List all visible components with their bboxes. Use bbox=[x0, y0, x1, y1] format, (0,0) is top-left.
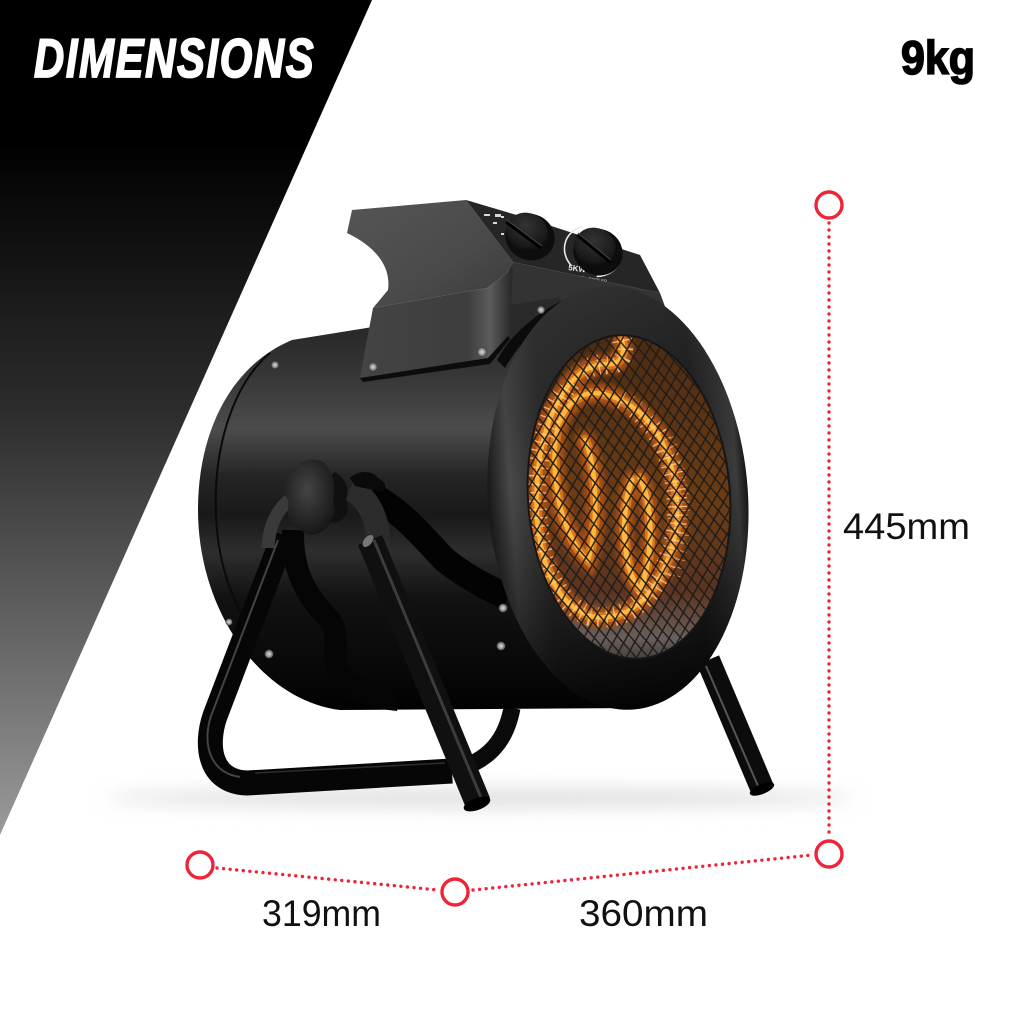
front stand leg bbox=[350, 488, 492, 814]
power label: 5KW bbox=[568, 263, 587, 275]
width label: 360mm bbox=[579, 893, 708, 934]
front plate of handle bbox=[360, 262, 513, 382]
S-shaped mounting bracket bbox=[293, 530, 398, 700]
glowing coils bbox=[537, 340, 679, 617]
rear rim line bbox=[216, 353, 270, 632]
weight label: 9kg bbox=[901, 31, 975, 84]
control panel bbox=[466, 200, 660, 293]
rear U-frame tube bbox=[462, 708, 512, 768]
coil glow bbox=[537, 340, 677, 617]
right front leg bbox=[706, 660, 776, 799]
ground shadow bbox=[105, 788, 855, 808]
side housing below panel bbox=[507, 262, 667, 337]
panel: black gradient diagonal banner bbox=[0, 0, 372, 835]
height dimension line bbox=[816, 192, 842, 867]
knob scale ring bbox=[557, 218, 629, 284]
height label: 445mm bbox=[843, 506, 970, 547]
outer coil bbox=[537, 340, 677, 617]
width dimension line bbox=[442, 855, 812, 905]
inner coil bbox=[624, 478, 650, 590]
grille background bbox=[528, 336, 730, 658]
left triangular stand bbox=[207, 495, 452, 783]
depth dimension line bbox=[187, 852, 438, 890]
coil fins bbox=[537, 340, 677, 617]
cylinder body bbox=[198, 297, 640, 710]
wire mesh bbox=[528, 336, 730, 658]
right knob bbox=[566, 221, 630, 283]
front ring bbox=[474, 277, 762, 719]
star adjustment knob bbox=[284, 460, 385, 535]
handle top plate bbox=[347, 200, 513, 308]
front flange strip bbox=[497, 290, 596, 368]
heater product illustration bbox=[198, 200, 776, 814]
panel small label: SILENCE · COOLER bbox=[565, 273, 608, 284]
heating element and grille bbox=[528, 336, 730, 658]
title: DIMENSIONS bbox=[34, 29, 314, 89]
left knob bbox=[498, 206, 562, 268]
fixing screws bbox=[226, 306, 545, 658]
panel icons bbox=[484, 214, 504, 235]
upper bracket bbox=[352, 486, 508, 598]
depth label: 319mm bbox=[262, 893, 381, 934]
